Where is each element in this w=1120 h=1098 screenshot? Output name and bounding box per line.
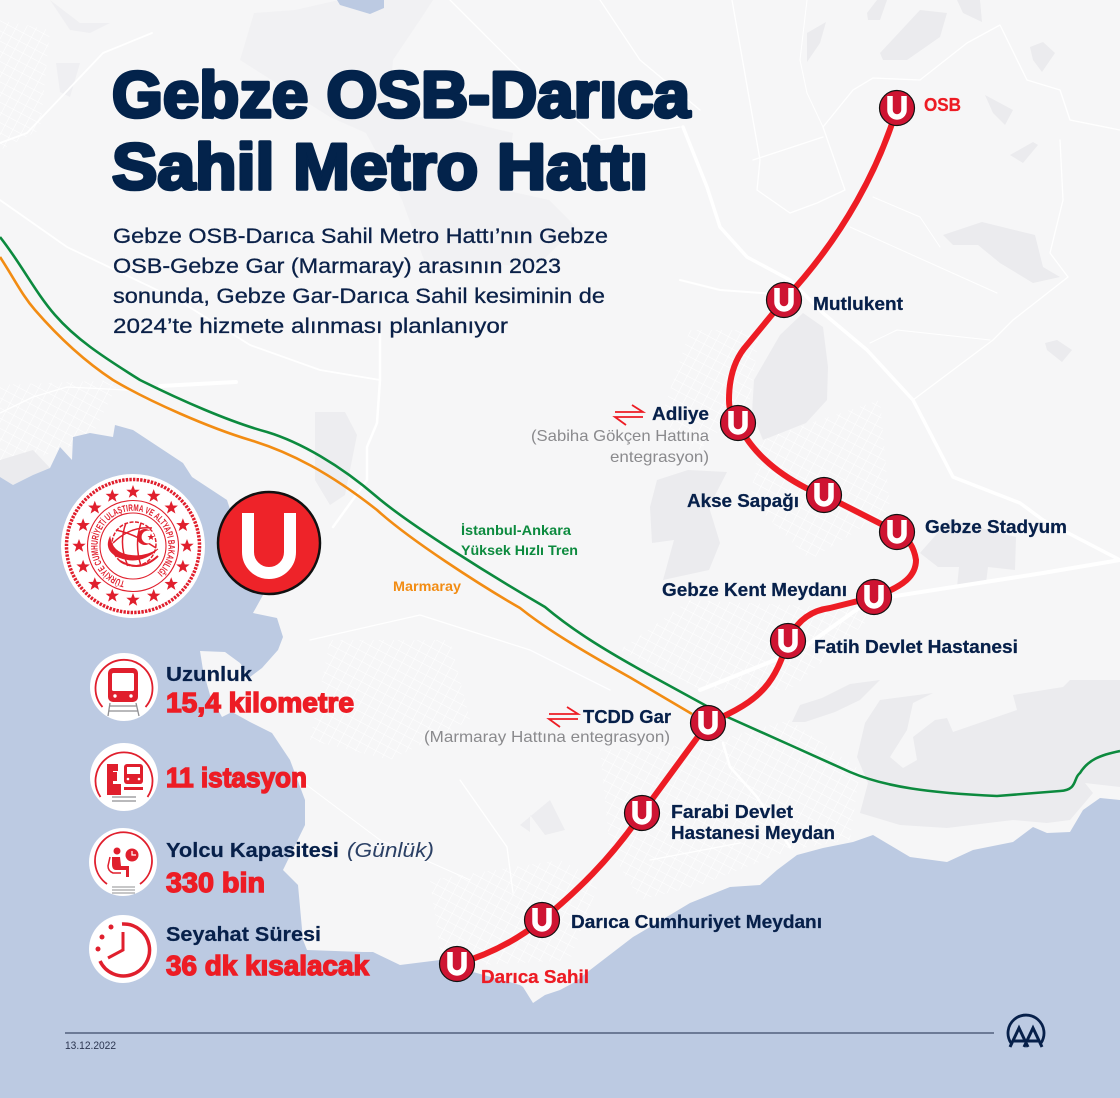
label: Farabi Devlet Hastanesi Meydan: Farabi Devlet <box>671 801 793 822</box>
footer rule <box>65 1032 994 1034</box>
label: Marmaray: Marmaray <box>393 578 461 594</box>
intro paragraph: 2024’te hizmete alınması planlanıyor <box>113 314 508 338</box>
stat: length: Uzunluk <box>166 663 253 686</box>
label: Adliye with integration note <box>531 403 709 466</box>
station: Gebze Kent Meydanı <box>856 580 892 614</box>
label: Adliye with integration note: entegrasyon) <box>610 449 709 466</box>
label: TCDD Gar with integration note <box>424 706 671 746</box>
intro paragraph: sonunda, Gebze Gar-Darıca Sahil kesiminin de <box>113 284 605 308</box>
label: Farabi Devlet Hastanesi Meydan: Hastanesi Meydan <box>671 822 835 843</box>
label: high speed train <box>461 522 578 558</box>
metro line <box>457 108 916 964</box>
station: Adliye <box>720 406 756 440</box>
label: OSB: OSB <box>924 94 961 115</box>
stat: passenger capacity <box>89 828 434 898</box>
stat: length: 15,4 kilometre <box>166 687 354 718</box>
stat: travel time: 36 dk kısalacak <box>166 950 369 981</box>
stat: passenger capacity: Yolcu Kapasitesi <box>166 839 339 862</box>
stat: stations <box>90 743 307 811</box>
label: Gebze Stadyum: Gebze Stadyum <box>925 516 1067 537</box>
icon: transfer arrows Adliye <box>615 405 643 425</box>
icon: clock <box>89 915 157 983</box>
stat: length <box>90 653 354 721</box>
map: lake <box>337 0 384 14</box>
station: Darıca Sahil <box>440 946 474 982</box>
station: Akse Sapağı <box>806 478 842 512</box>
label: Darıca Sahil: Darıca Sahil <box>481 966 589 987</box>
icon: station <box>90 743 158 811</box>
footer date: 13.12.2022 <box>65 1040 116 1052</box>
station: Farabi Devlet Hastanesi Meydan <box>624 796 660 830</box>
map: sea <box>0 425 1120 1098</box>
label: Adliye with integration note: (Sabiha Gökçen Hattına <box>531 428 709 445</box>
station: Darıca Cumhuriyet Meydanı <box>524 902 560 938</box>
label: TCDD Gar with integration note: TCDD Gar <box>583 706 671 727</box>
railway line: Marmaray <box>0 257 692 714</box>
stat: passenger capacity: 330 bin <box>166 867 265 898</box>
map: urban street texture <box>0 20 890 965</box>
station: Fatih Devlet Hastanesi <box>770 624 806 658</box>
label: high speed train: Yüksek Hızlı Tren <box>461 542 578 558</box>
map: built-up grey areas <box>0 0 1120 835</box>
icon: transfer arrows TCDD Gar <box>549 707 578 727</box>
stat: passenger capacity: (Günlük) <box>347 840 434 862</box>
label: Farabi Devlet Hastanesi Meydan <box>671 801 835 843</box>
intro paragraph: Gebze OSB-Darıca Sahil Metro Hattı’nın Gebze <box>113 224 608 248</box>
stat: stations: 11 istasyon <box>166 762 307 793</box>
stat: travel time <box>89 915 369 983</box>
railway line: İstanbul-Ankara high speed train <box>0 237 1120 796</box>
logo: AA <box>1008 1015 1044 1047</box>
station: OSB <box>880 90 914 126</box>
logo: metro U <box>218 492 320 594</box>
label: Mutlukent: Mutlukent <box>813 293 903 314</box>
station: Mutlukent <box>766 282 802 318</box>
intro paragraph: OSB-Gebze Gar (Marmaray) arasının 2023 <box>113 254 561 278</box>
station: TCDD Gar <box>690 706 726 740</box>
stat: travel time: Seyahat Süresi <box>166 923 321 946</box>
title <box>112 58 691 203</box>
icon: passenger with clock <box>89 828 157 896</box>
label: Fatih Devlet Hastanesi: Fatih Devlet Hastanesi <box>814 636 1018 657</box>
label: TCDD Gar with integration note: (Marmaray Hattına entegrasyon) <box>424 729 670 746</box>
label: Adliye with integration note: Adliye <box>652 403 709 424</box>
logo: ministry seal: TÜRKİYE CUMHURİYETİ ULAŞTIRMA VE ALTYAPI BAKANLIĞI <box>91 504 175 588</box>
label: Akse Sapağı: Akse Sapağı <box>687 490 799 511</box>
label: Gebze Kent Meydanı: Gebze Kent Meydanı <box>662 579 847 600</box>
label: Darıca Cumhuriyet Meydanı: Darıca Cumhuriyet Meydanı <box>571 911 822 932</box>
icon: train <box>90 653 158 721</box>
logo: ministry seal <box>61 474 205 618</box>
station: Gebze Stadyum <box>880 514 914 550</box>
title: Sahil Metro Hattı <box>112 130 648 203</box>
intro paragraph <box>113 224 608 338</box>
title: Gebze OSB-Darıca <box>112 58 691 131</box>
label: high speed train: İstanbul-Ankara <box>461 522 571 538</box>
